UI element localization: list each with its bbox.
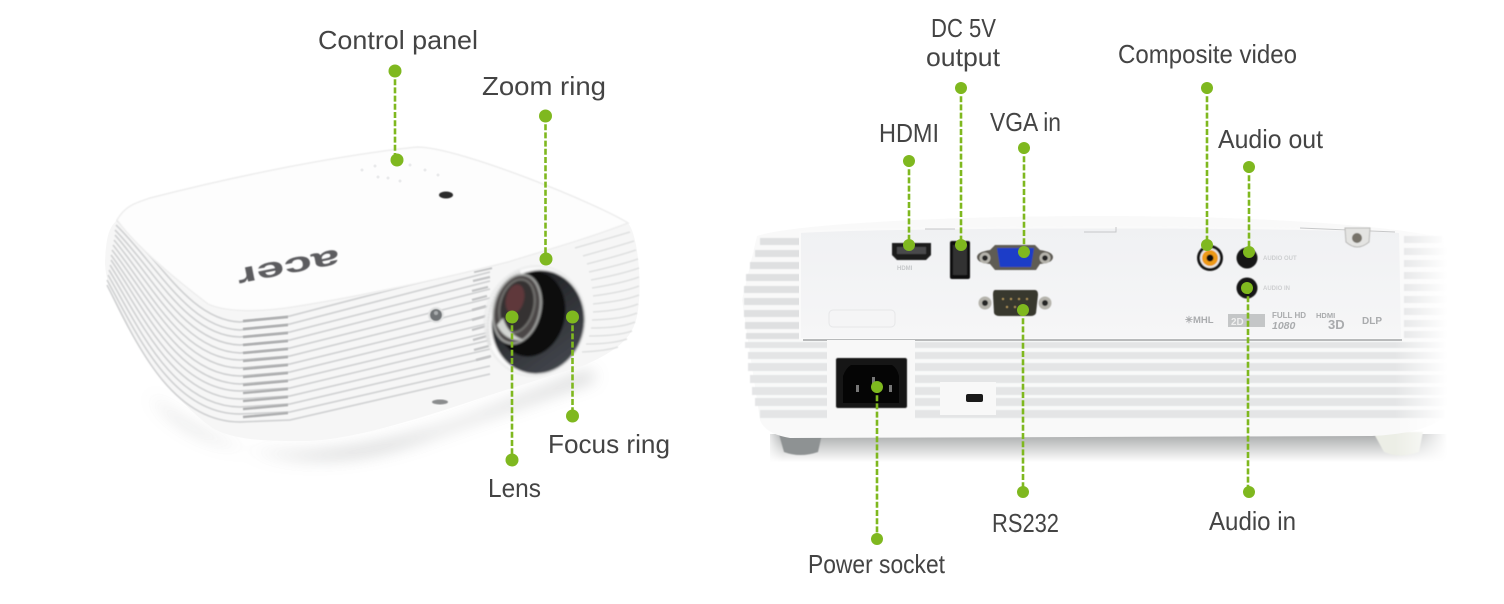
- USB DC output port: [950, 241, 970, 279]
- callout: HDMI: [879, 118, 939, 251]
- power socket module: [827, 340, 915, 420]
- composite video jack: [1197, 245, 1223, 271]
- IR sensor: [428, 307, 444, 323]
- callout: power socket: Power socket: [808, 549, 946, 579]
- callout: composite video: [1118, 39, 1297, 251]
- callout: RS232: [992, 304, 1059, 538]
- VGA port: [977, 245, 1053, 270]
- right side ribs: [1404, 236, 1466, 338]
- audio in jack: [1236, 278, 1258, 298]
- panel screw: [1345, 228, 1370, 247]
- HDMI port label: HDMI: [897, 266, 913, 272]
- ribs beside lens: [575, 232, 639, 352]
- body ventilation ribs: [107, 220, 490, 422]
- callout: focus ring: [548, 310, 670, 459]
- side vent slots: [243, 317, 288, 417]
- callout: audio in: [1209, 282, 1296, 536]
- right edge fade: [1395, 210, 1470, 466]
- callout: HDMI: HDMI: [879, 118, 939, 148]
- top surface: [117, 147, 628, 311]
- lens assembly: [475, 257, 595, 385]
- acer logo: acer: [235, 243, 343, 294]
- certification logos: 2D: [1231, 317, 1244, 328]
- connector panel: [800, 227, 1402, 340]
- front foot: [432, 400, 448, 404]
- indicator window: [439, 192, 453, 198]
- floor shadow: [770, 434, 1450, 462]
- certification logos: DLP: [1362, 316, 1382, 327]
- RS232 port: [978, 290, 1052, 316]
- audio jack labels: AUDIO IN: [1263, 286, 1290, 292]
- callout: DC 5V output: output: [926, 42, 1001, 72]
- front projector illustration: [105, 147, 640, 458]
- callout: audio out: [1218, 124, 1324, 258]
- audio out jack: [1236, 248, 1258, 268]
- projector body: [105, 147, 640, 441]
- rear body: [742, 216, 1462, 438]
- callout: control panel: Control panel: [318, 25, 478, 55]
- audio jack labels: AUDIO OUT: [1263, 256, 1297, 262]
- certification logos: HDMI: [1316, 311, 1335, 320]
- callout: VGA in: VGA in: [990, 107, 1061, 137]
- callout: zoom ring: [482, 71, 606, 266]
- callout: DC 5V output: DC 5V: [931, 13, 997, 43]
- zoom ring: [475, 257, 595, 385]
- lens glass: [486, 269, 548, 349]
- callout: power socket: [808, 381, 946, 579]
- rear feet: [779, 432, 1423, 456]
- callout: audio out: Audio out: [1218, 124, 1324, 154]
- HDMI port: [892, 243, 931, 260]
- left side ribs: [744, 238, 800, 339]
- callout: RS232: RS232: [992, 508, 1059, 538]
- security lock slot: [940, 382, 996, 415]
- control panel buttons: [360, 164, 440, 182]
- callout: DC 5V output: [926, 13, 1001, 251]
- callout: audio in: Audio in: [1209, 506, 1296, 536]
- certification logos: 1080: [1272, 320, 1296, 332]
- rear projector illustration: [742, 210, 1470, 466]
- short slots beside lens: [472, 268, 492, 360]
- certification logos: ✳MHL: [1185, 315, 1214, 326]
- callout: lens: Lens: [488, 473, 541, 503]
- callout: control panel: [318, 25, 478, 166]
- knurled ring edge: [488, 272, 520, 345]
- inner barrel: [489, 265, 573, 363]
- callout: VGA in: [990, 107, 1061, 258]
- shadow left fade: [765, 434, 783, 464]
- audio jack labels: [1263, 256, 1297, 292]
- projector shadow: [150, 372, 595, 458]
- certification logos: [1185, 311, 1382, 332]
- callout: lens: [488, 310, 541, 503]
- callout: composite video: Composite video: [1118, 39, 1297, 69]
- certification logos: 3D: [1328, 317, 1345, 332]
- lower ventilation ribs: [745, 342, 1455, 418]
- callout: focus ring: Focus ring: [548, 429, 670, 459]
- focus barrel: [482, 262, 594, 382]
- certification logos: FULL HD: [1272, 311, 1306, 320]
- callout: zoom ring: Zoom ring: [482, 71, 606, 101]
